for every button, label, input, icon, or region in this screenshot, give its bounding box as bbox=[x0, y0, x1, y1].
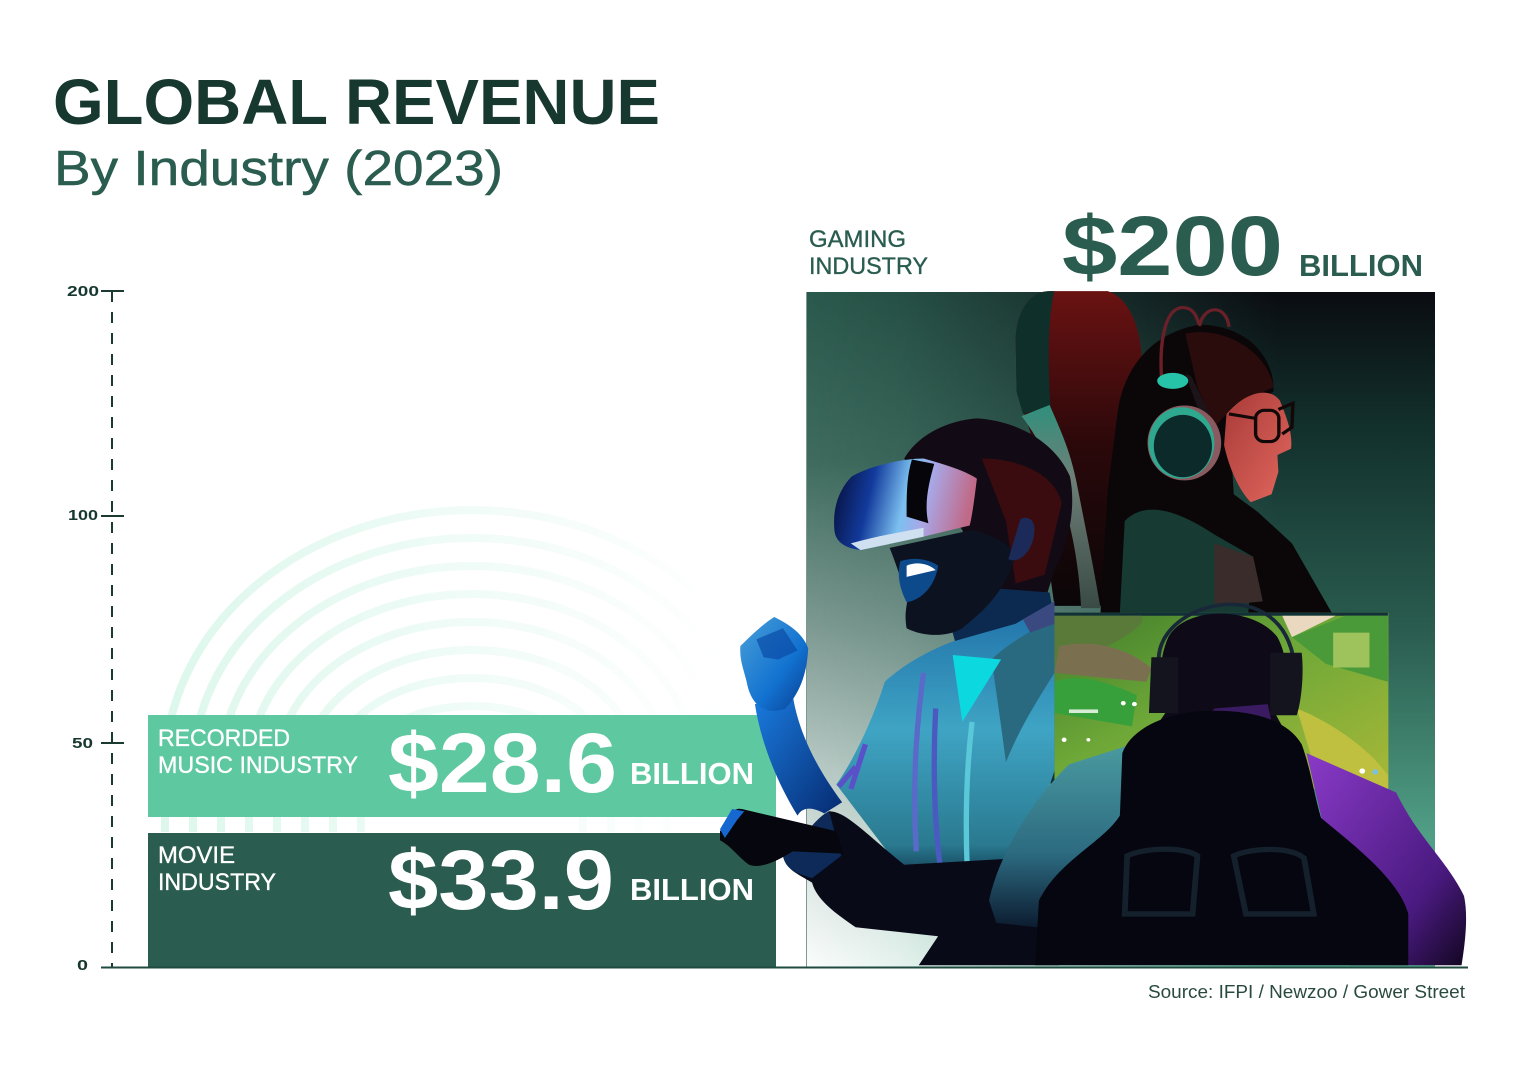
ear bbox=[1008, 518, 1034, 560]
title: GLOBAL REVENUE bbox=[53, 66, 660, 138]
VR headset bbox=[834, 459, 977, 550]
raised arm and fist bbox=[740, 617, 842, 816]
bar: recorded music bbox=[148, 715, 776, 817]
axis tick 100: 100 bbox=[68, 507, 98, 524]
music value: $28.6 bbox=[388, 716, 617, 810]
axis tick 50 bbox=[72, 735, 124, 752]
head bbox=[1156, 614, 1286, 726]
hand and lower torso bbox=[783, 811, 1059, 965]
gaming chair back bbox=[1035, 711, 1408, 965]
monitor with game bbox=[1051, 613, 1388, 789]
bar: gaming panel background bbox=[806, 292, 1435, 967]
neck and collar shadow bbox=[953, 588, 1054, 651]
movie label: INDUSTRY bbox=[158, 869, 276, 896]
gaming label: INDUSTRY bbox=[809, 253, 928, 280]
gaming unit: BILLION bbox=[1299, 248, 1423, 283]
movie label bbox=[158, 842, 276, 896]
game controller bbox=[720, 809, 844, 866]
left sleeve bbox=[989, 744, 1132, 927]
movie unit: BILLION bbox=[630, 872, 754, 907]
movie label: MOVIE bbox=[158, 842, 235, 869]
t-shirt bbox=[953, 655, 1001, 722]
purple jacket bbox=[1306, 753, 1466, 965]
movie value: $33.9 bbox=[388, 833, 614, 927]
infographic canvas bbox=[56, 79, 1468, 998]
woman with headphones bbox=[1100, 308, 1332, 613]
headphones bbox=[1148, 308, 1229, 480]
man's hair bbox=[904, 418, 1072, 619]
baseline bbox=[101, 966, 1468, 968]
gaming heading bbox=[809, 199, 1423, 293]
gaming value: $200 bbox=[1062, 199, 1283, 293]
man's face bbox=[890, 530, 1016, 635]
music unit: BILLION bbox=[630, 756, 754, 791]
source: Source: IFPI / Newzoo / Gower Street bbox=[1148, 982, 1465, 1002]
music label: MUSIC INDUSTRY bbox=[158, 752, 358, 779]
axis tick 50: 50 bbox=[72, 735, 93, 752]
axis tick 100 bbox=[68, 507, 124, 524]
woman's face bbox=[1224, 393, 1291, 502]
gaming chair behind bbox=[1016, 291, 1142, 608]
music label: RECORDED bbox=[158, 725, 290, 752]
headset on head bbox=[1149, 604, 1303, 715]
subtitle: By Industry (2023) bbox=[54, 142, 503, 196]
axis tick 200 bbox=[67, 283, 124, 300]
axis tick 200: 200 bbox=[67, 283, 99, 300]
gaming label bbox=[809, 226, 928, 280]
decorative concentric rings bbox=[165, 510, 779, 832]
torso highlight bbox=[1120, 510, 1253, 613]
axis tick 0: 0 bbox=[77, 957, 88, 974]
man facing monitor bbox=[989, 604, 1466, 965]
gaming label: GAMING bbox=[809, 226, 906, 253]
y axis bbox=[67, 283, 124, 974]
glasses bbox=[1229, 403, 1293, 442]
man with VR headset bbox=[720, 418, 1072, 965]
shirt bbox=[836, 601, 1054, 887]
bar: movie bbox=[148, 833, 776, 967]
music label bbox=[158, 725, 358, 779]
gamers illustration bbox=[720, 291, 1466, 965]
